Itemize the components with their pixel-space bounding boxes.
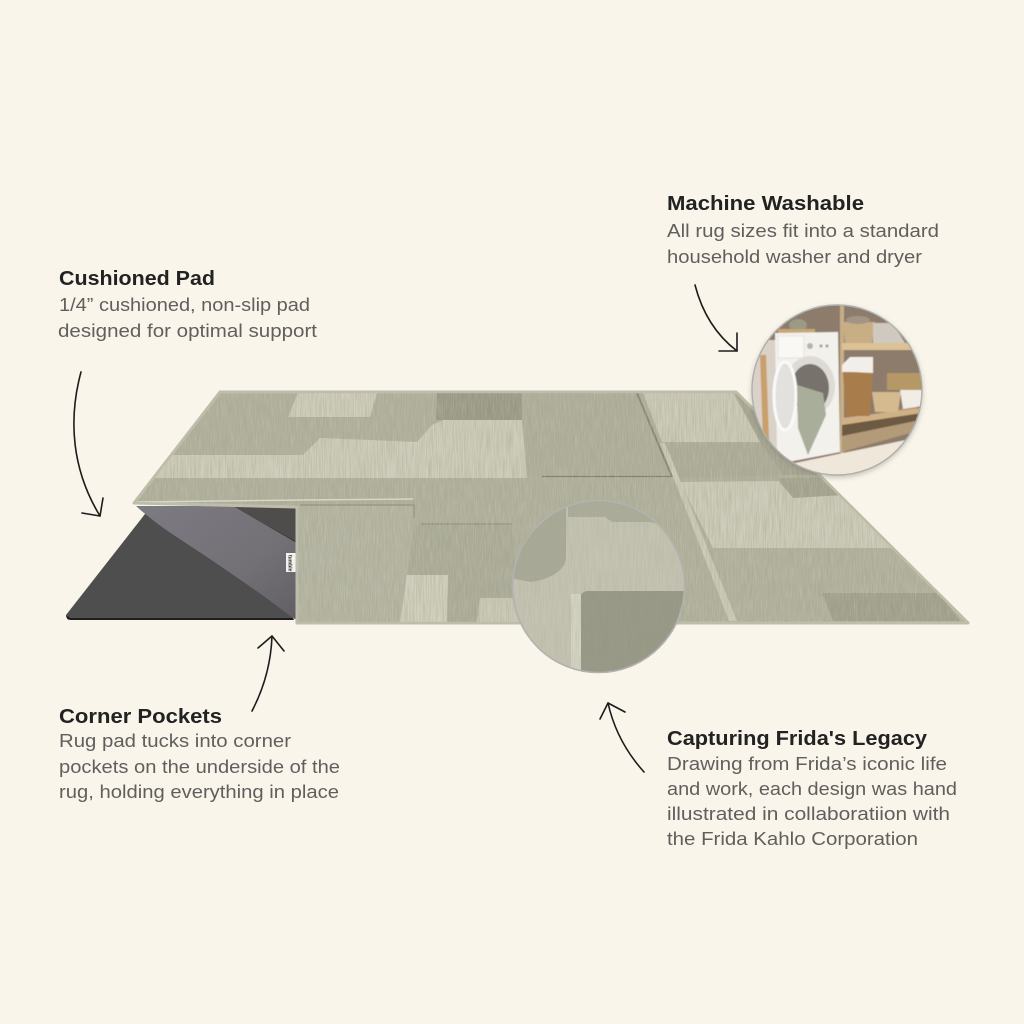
washer body xyxy=(775,332,840,463)
arrow: frida legacy xyxy=(600,703,644,772)
rug patches xyxy=(130,388,970,628)
centre lower band xyxy=(408,554,477,622)
light texture xyxy=(130,388,970,628)
texture streaks xyxy=(130,388,970,628)
pad crease line xyxy=(233,507,297,543)
text: cushioned pad xyxy=(58,267,317,341)
light band xyxy=(155,420,527,478)
lower cabinet xyxy=(842,406,918,452)
text: cushioned pad: designed for optimal support xyxy=(58,320,317,341)
medium patch: lower right xyxy=(908,564,936,593)
carved line: lower xyxy=(421,524,512,525)
wicker basket xyxy=(843,372,873,416)
light strip xyxy=(660,443,737,621)
folded rug underside xyxy=(136,506,297,620)
medium patch: right xyxy=(662,443,783,478)
laundry photo circle xyxy=(750,303,925,480)
towel xyxy=(797,385,826,455)
floor xyxy=(794,440,905,474)
text: cushioned pad: 1/4” cushioned, non-slip pad xyxy=(59,294,310,315)
light patch: top right xyxy=(643,393,760,442)
text: capturing frida's legacy: Capturing Frida's Legacy xyxy=(667,727,928,750)
arrow: cushioned pad xyxy=(74,372,103,516)
magnifier top band xyxy=(568,501,656,524)
light patch: bottom xyxy=(477,598,520,622)
top cloth xyxy=(846,316,870,324)
pot and shelf on washer xyxy=(778,319,815,333)
back basket xyxy=(887,373,921,390)
text: corner pockets xyxy=(59,705,340,802)
dark patch: top centre xyxy=(436,393,522,420)
door ring xyxy=(785,356,835,416)
washer control panel xyxy=(778,336,829,358)
magnifier lower dark patch xyxy=(581,591,684,672)
light patch: bottom centre xyxy=(400,575,448,622)
centre top panel xyxy=(525,393,672,477)
fold shadow xyxy=(300,505,414,518)
text: machine washable: All rug sizes fit into a standard xyxy=(667,220,939,241)
pad seen behind fold xyxy=(232,507,297,543)
carved line: centre xyxy=(542,476,672,478)
rug base xyxy=(134,392,968,623)
text: capturing frida's legacy xyxy=(667,727,957,849)
magnified rug detail xyxy=(510,498,690,678)
magnifier light strip xyxy=(571,594,581,678)
arrow: machine washable xyxy=(695,285,737,351)
top basket xyxy=(843,322,875,343)
fold highlight xyxy=(137,499,413,502)
arrow: corner pockets xyxy=(252,636,284,711)
circle shadow xyxy=(752,307,922,477)
text: machine washable: household washer and dryer xyxy=(667,246,922,267)
dark patch: right xyxy=(778,478,838,498)
magnifier left patch xyxy=(514,508,566,582)
text: capturing frida's legacy: illustrated in collaboratiion with xyxy=(667,803,950,824)
text: capturing frida's legacy: the Frida Kahlo Corporation xyxy=(667,828,918,849)
upright xyxy=(840,303,844,463)
pad bottom edge xyxy=(66,615,294,620)
white bowl xyxy=(900,390,922,409)
text: corner pockets: Corner Pockets xyxy=(59,705,222,728)
rug xyxy=(130,388,970,628)
text: corner pockets: pockets on the underside of the xyxy=(59,756,340,777)
text: capturing frida's legacy: and work, each design was hand xyxy=(667,778,957,799)
upper shelf xyxy=(842,343,912,350)
basket towel xyxy=(842,357,873,373)
front panel xyxy=(297,506,414,622)
carved dark line xyxy=(637,393,672,477)
open door xyxy=(774,362,796,430)
wood post xyxy=(760,355,769,440)
light patch: top left xyxy=(288,393,377,417)
light patch: big right xyxy=(680,481,902,548)
dark pad surface xyxy=(66,514,297,618)
text: machine washable xyxy=(667,192,939,267)
small basket xyxy=(872,392,901,412)
magnifier ring xyxy=(512,500,684,672)
text: machine washable: Machine Washable xyxy=(667,192,864,215)
brand tag xyxy=(286,553,296,572)
photo ring xyxy=(752,305,922,475)
text: capturing frida's legacy: Drawing from Frida’s iconic life xyxy=(667,753,947,774)
rug pad and folded corner xyxy=(66,506,297,620)
infographic canvas xyxy=(58,195,970,849)
wall xyxy=(769,306,922,462)
rug edge xyxy=(134,392,968,623)
left wall xyxy=(752,339,778,450)
magnifier base xyxy=(513,507,684,667)
cabinet shadow xyxy=(842,412,920,436)
drum xyxy=(791,364,829,412)
text: corner pockets: Rug pad tucks into corner xyxy=(59,730,291,751)
magnifier texture xyxy=(520,508,678,670)
top right corner xyxy=(736,394,818,475)
brand tag: tumble xyxy=(286,555,292,572)
lower shelf xyxy=(842,408,922,425)
glass jars xyxy=(873,323,905,343)
text: corner pockets: rug, holding everything in place xyxy=(59,781,339,802)
dark patch: bottom right xyxy=(822,593,960,621)
text: cushioned pad: Cushioned Pad xyxy=(59,267,215,290)
